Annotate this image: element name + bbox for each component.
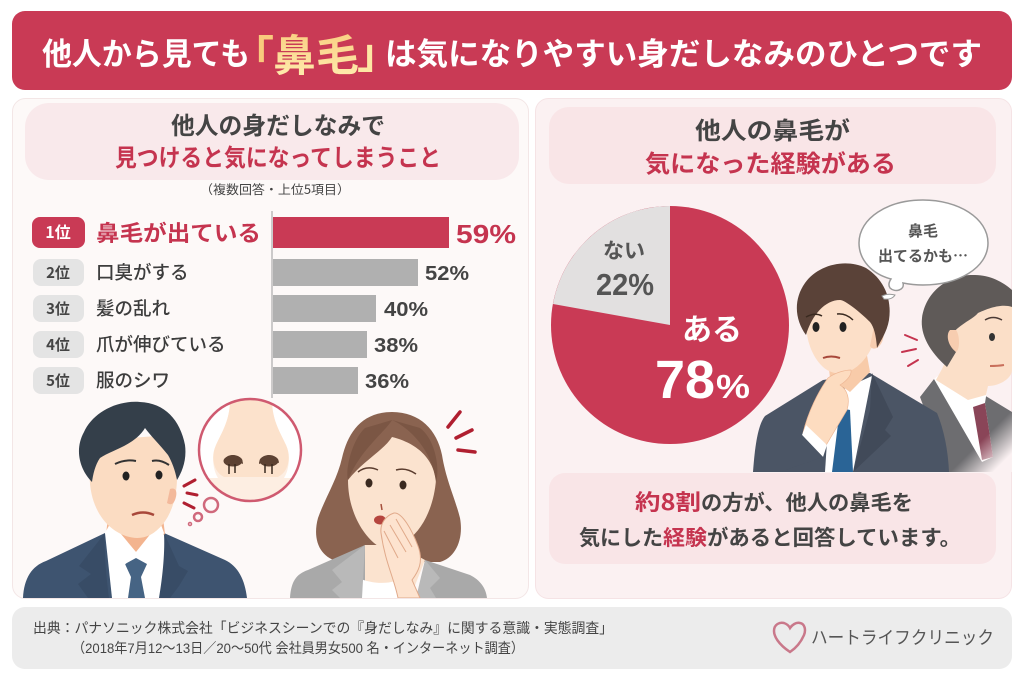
pie label: none 22%: 22%	[596, 267, 654, 302]
speech bubble: 鼻毛	[908, 220, 938, 241]
survey note: （複数回答・上位5項目）	[200, 179, 350, 198]
bar row 5: 36%	[365, 371, 409, 393]
bar row 5	[33, 367, 409, 394]
bar row 2: 2位	[46, 262, 70, 283]
panel: left survey	[12, 98, 528, 598]
source text: 出典：パナソニック株式会社「ビジネスシーンでの『身だしなみ』に関する意識・実態調査」	[33, 618, 613, 638]
title banner: 「	[232, 23, 274, 84]
source text	[33, 618, 613, 656]
bar chart	[32, 211, 516, 398]
title banner: 他人から見ても	[42, 29, 250, 74]
callout: about 80 percent	[549, 473, 996, 564]
title banner: 」	[357, 20, 399, 81]
clinic logo	[774, 623, 994, 652]
left panel heading: 他人の身だしなみで	[171, 106, 385, 141]
pie label: yes 78%	[655, 305, 750, 410]
source footer	[12, 607, 1012, 669]
bar row 4	[33, 331, 418, 358]
bar row 1	[32, 216, 516, 249]
pie label: none 22%: ない	[603, 235, 645, 265]
bar row 5: 5位	[46, 370, 70, 391]
bar row 3	[33, 295, 428, 322]
illustration: thinking man	[753, 263, 949, 472]
callout: about 80 percent: 気にした	[579, 522, 663, 552]
left panel heading	[25, 103, 519, 180]
icon: thought bubble	[188, 498, 218, 526]
clinic logo: ハートライフクリニック	[811, 624, 994, 650]
bar row 2	[33, 259, 469, 286]
left panel heading: 見つけると気になってしまうこと	[115, 138, 441, 173]
bar row 3: 40%	[384, 299, 428, 321]
bar row 5: 服のシワ	[96, 367, 170, 393]
pie chart	[551, 206, 789, 444]
right panel heading: 他人の鼻毛が	[695, 111, 850, 146]
bar row 4: 38%	[374, 335, 418, 357]
bar row 1: 1位	[45, 219, 71, 243]
speech bubble	[859, 200, 988, 299]
icon: nose close-up	[198, 399, 302, 501]
illustration: surprised woman	[290, 412, 487, 598]
pie label: yes 78%: %	[716, 368, 750, 405]
illustration: background man	[902, 275, 1012, 472]
callout: about 80 percent: 経験	[663, 522, 707, 552]
right panel heading	[549, 107, 996, 184]
illustration: worried man	[23, 402, 247, 598]
pie label: yes 78%: 78	[655, 350, 715, 410]
callout: about 80 percent: の方が、他人の鼻毛を	[701, 487, 913, 517]
bar row 1: 鼻毛が出ている	[96, 216, 261, 248]
panel: right experience	[536, 98, 1012, 598]
bar row 2: 口臭がする	[96, 259, 189, 285]
bar row 4: 4位	[46, 334, 70, 355]
bar row 3: 3位	[46, 298, 70, 319]
speech bubble: 出てるかも…	[878, 245, 968, 266]
bar row 2: 52%	[425, 263, 469, 285]
bar row 4: 爪が伸びている	[96, 331, 226, 357]
callout: about 80 percent: 約8割	[635, 485, 701, 517]
title banner: 鼻毛	[273, 22, 359, 84]
bar row 3: 髪の乱れ	[96, 295, 171, 321]
pie label: none 22%	[596, 235, 654, 302]
pie label: yes 78%: ある	[682, 305, 742, 349]
callout: about 80 percent: があると回答しています。	[707, 522, 961, 552]
right panel heading: 気になった経験がある	[645, 144, 896, 179]
title banner	[12, 11, 1012, 90]
source text: （2018年7月12～13日／20～50代 会社員男女500 名・インターネット調査）	[72, 640, 524, 656]
bar row 1: 59%	[456, 219, 516, 249]
title banner: は気になりやすい身だしなみのひとつです	[385, 29, 982, 74]
